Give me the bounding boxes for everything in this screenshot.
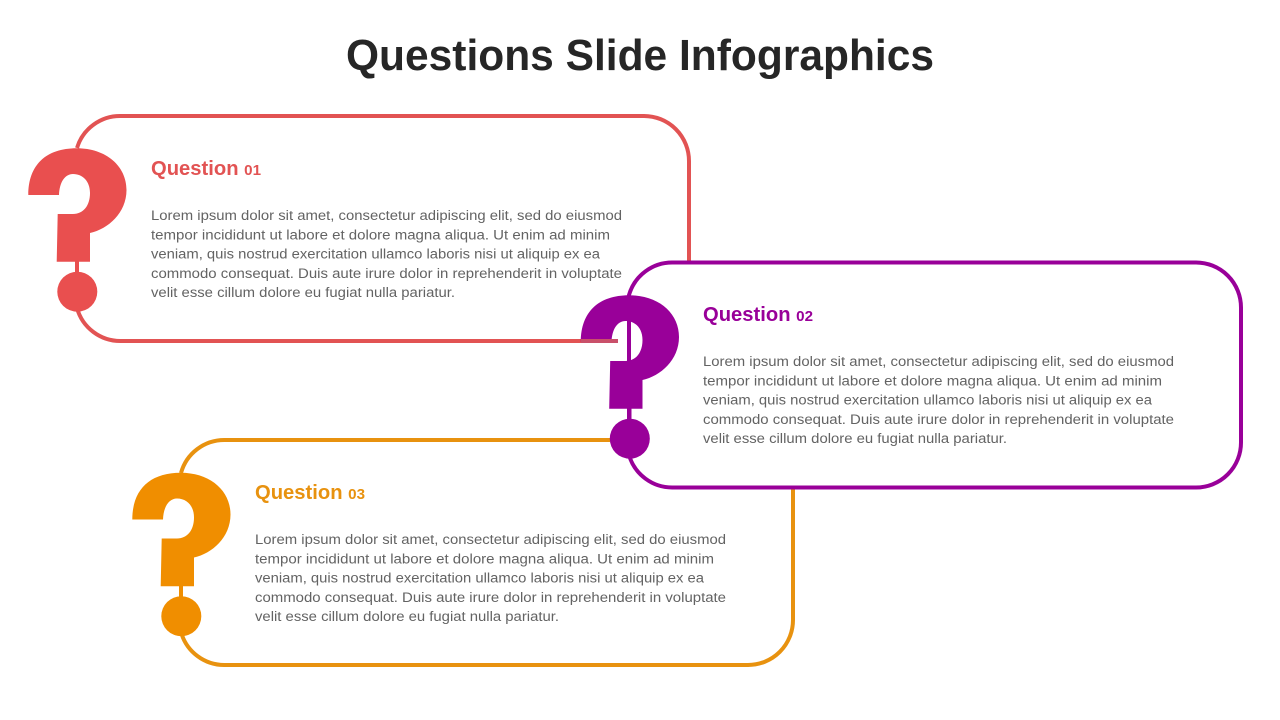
text block: question 03 (255, 532, 726, 625)
panel: question 01 content (28, 148, 622, 341)
text block: question 03: tempor incididunt ut labore et dolore magna aliqua. Ut enim ad minim (255, 551, 714, 567)
heading: question 01: Question 01 (151, 158, 261, 180)
panel: question 01 outline (77, 116, 689, 341)
text block: question 01: veniam, quis nostrud exercitation ullamco laboris nisi ut aliquip ex ea (151, 247, 600, 263)
text block: question 02: commodo consequat. Duis aute irure dolor in reprehenderit in voluptate (703, 412, 1174, 428)
panel outline: question 02 (629, 262, 1241, 488)
text block: question 01: commodo consequat. Duis aute irure dolor in reprehenderit in voluptate (151, 266, 622, 282)
text block: question 02: veniam, quis nostrud exercitation ullamco laboris nisi ut aliquip ex ea (703, 393, 1152, 409)
text block: question 03: velit esse cillum dolore eu fugiat nulla pariatur. (255, 609, 559, 625)
text block: question 01: Lorem ipsum dolor sit amet, consectetur adipiscing elit, sed do eiusmod (151, 208, 622, 224)
text block: question 02: Lorem ipsum dolor sit amet, consectetur adipiscing elit, sed do eiusmod (703, 354, 1174, 370)
connector: question 01 bottom edge over question mark (581, 339, 618, 343)
text block: question 02 (703, 354, 1174, 447)
text block: question 03: commodo consequat. Duis aute irure dolor in reprehenderit in voluptate (255, 590, 726, 606)
panel outline: question 03 (181, 440, 793, 665)
text block: question 03: Lorem ipsum dolor sit amet, consectetur adipiscing elit, sed do eiusmod (255, 532, 726, 548)
title: Questions Slide Infographics (346, 31, 934, 80)
heading: question 02: Question 02 (703, 304, 813, 326)
icon: question mark 02 (581, 295, 679, 459)
text block: question 02: tempor incididunt ut labore et dolore magna aliqua. Ut enim ad minim (703, 373, 1162, 389)
panel: question 03 (132, 440, 793, 665)
text block: question 01: tempor incididunt ut labore et dolore magna aliqua. Ut enim ad minim (151, 227, 610, 243)
panel: question 02 (581, 262, 1241, 488)
text block: question 02: velit esse cillum dolore eu fugiat nulla pariatur. (703, 431, 1007, 447)
text block: question 01 (151, 208, 622, 301)
icon: question mark 01 (28, 148, 126, 312)
heading: question 03: Question 03 (255, 482, 365, 504)
text block: question 03: veniam, quis nostrud exercitation ullamco laboris nisi ut aliquip ex ea (255, 571, 704, 587)
text block: question 01: velit esse cillum dolore eu fugiat nulla pariatur. (151, 285, 455, 301)
icon: question mark 03 (132, 473, 230, 636)
